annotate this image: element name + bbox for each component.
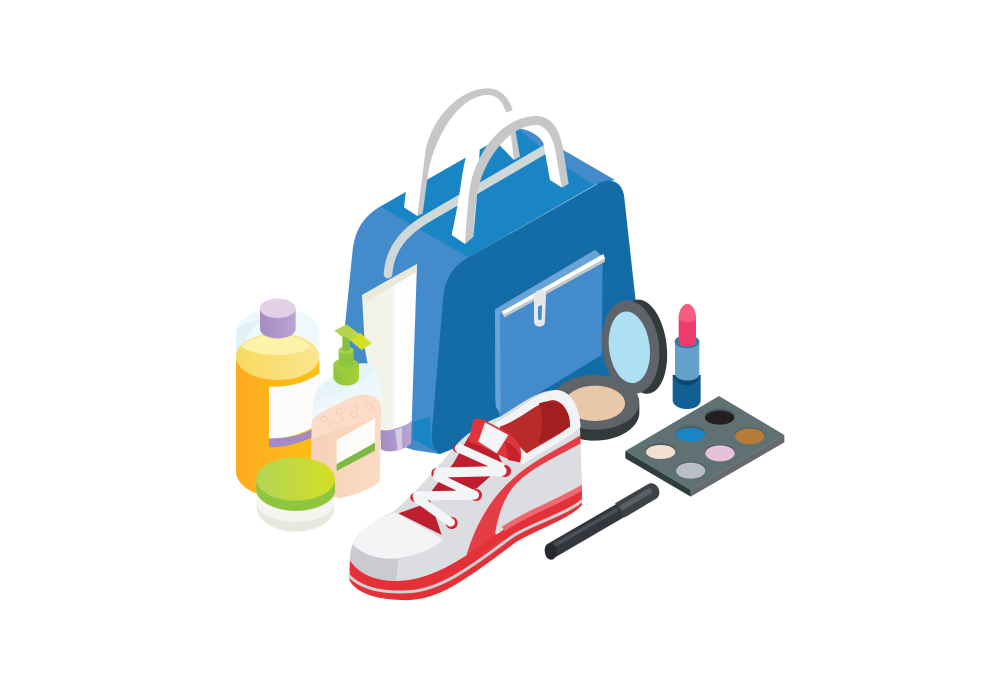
pump collar (333, 365, 359, 386)
red and white sneaker (347, 390, 587, 600)
clear soap bottle top (312, 363, 381, 430)
blue travel bag (335, 88, 640, 454)
orange body (236, 360, 319, 497)
yellow and orange shampoo bottle (236, 299, 319, 497)
shoe tongue (478, 422, 508, 453)
bag lower corner wedge (413, 417, 440, 454)
pump head (334, 324, 372, 350)
jar lid side (256, 481, 335, 511)
lipstick sleeve (675, 341, 699, 380)
red side stripe (467, 435, 581, 562)
mirror (605, 309, 654, 386)
front handle (452, 116, 569, 244)
bag top back strip (517, 128, 615, 185)
compact lid (597, 297, 665, 397)
eyeshadow palette (625, 396, 784, 497)
bag left face (335, 207, 470, 454)
zipper pull (534, 290, 546, 327)
clear bottle shoulder (236, 308, 319, 365)
shoe upper (350, 390, 582, 583)
jar lid top (256, 457, 335, 501)
sole stripes (347, 485, 587, 592)
white shoelaces (410, 444, 511, 529)
front pocket (495, 250, 605, 417)
back handle (404, 88, 520, 216)
eyeshadow wells (646, 409, 765, 477)
eyeshadow pans (705, 411, 734, 425)
eyeliner pencil (545, 483, 659, 560)
powder (565, 386, 625, 421)
compact lid back (613, 297, 672, 397)
lipstick bullet (679, 304, 696, 346)
lipstick (673, 304, 701, 409)
toe shading (350, 533, 398, 582)
peach bottle body (311, 395, 381, 498)
jar body (257, 497, 334, 532)
shoe collar (483, 390, 581, 464)
tube cap (381, 421, 412, 451)
toe cap (353, 512, 443, 559)
soap bubbles (321, 403, 373, 429)
pump neck (339, 350, 354, 367)
bottle cap (260, 308, 296, 338)
zipper strap (388, 150, 544, 274)
bottle label (269, 373, 319, 439)
bag right face (432, 181, 640, 454)
green lidded cream jar (256, 457, 335, 532)
bag top face (380, 128, 615, 257)
lipstick base (673, 375, 701, 409)
eyeliner cap (615, 483, 659, 517)
yellow liquid top (236, 333, 319, 380)
isometric illustration: bag and cosmetics (236, 88, 784, 600)
face powder compact with mirror (551, 297, 672, 441)
pocket zipper (502, 254, 605, 315)
soap label (337, 418, 375, 464)
red lace panel (398, 432, 503, 535)
cream tube with purple cap (362, 264, 417, 451)
pump soap bottle (311, 324, 381, 498)
compact base (551, 403, 639, 441)
shoe sole (349, 485, 582, 600)
